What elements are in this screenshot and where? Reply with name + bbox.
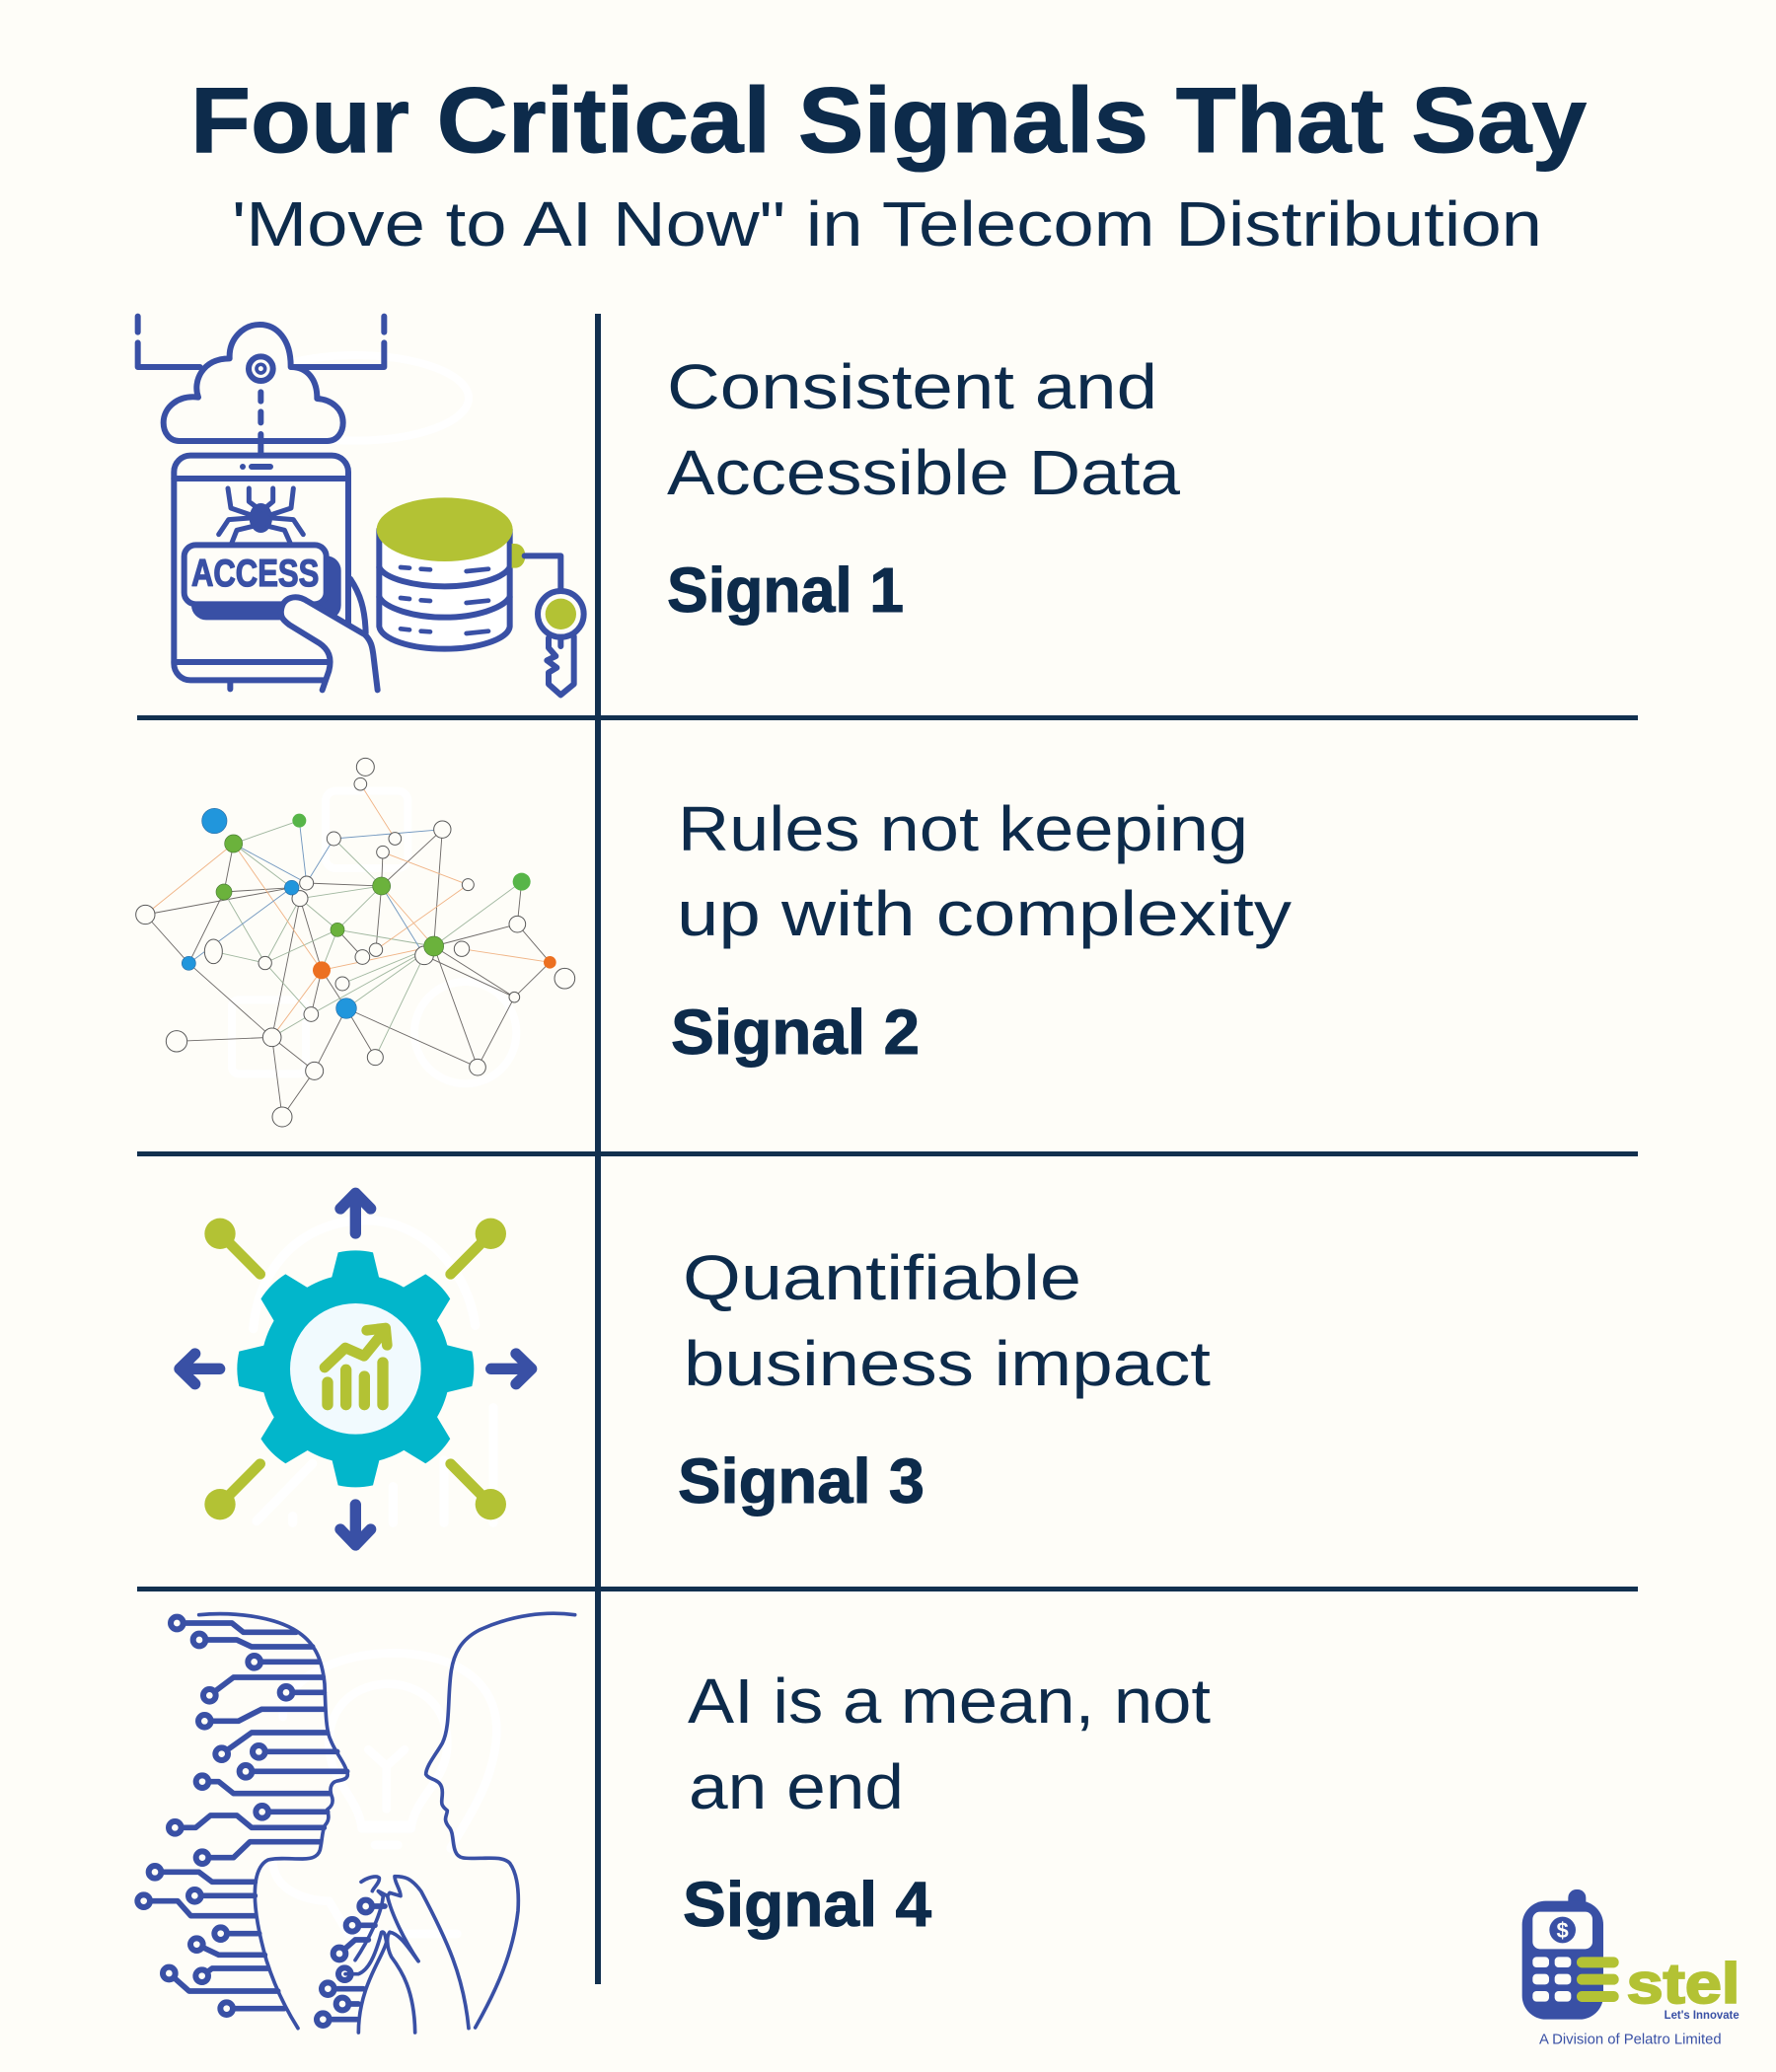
signal 1 statement: Consistent and: [667, 351, 1157, 422]
key: [525, 555, 584, 695]
hands: [345, 1877, 469, 2033]
network nodes: white: [136, 758, 575, 1127]
signal 4 statement: AI is a mean, not: [688, 1665, 1211, 1737]
spider: [219, 488, 303, 543]
signal 1 text block: Accessible Data: [667, 437, 1180, 508]
signal 1 label: Signal 1: [667, 555, 904, 626]
network nodes: orange: [313, 956, 556, 979]
signal 4 text block: [683, 1665, 1211, 1940]
horizontal divider 1: [137, 715, 1638, 720]
vertical divider: [595, 314, 601, 1984]
phone handset: [1522, 1889, 1603, 2020]
target in cloud: [249, 356, 273, 455]
signal 3 statement: Quantifiable: [683, 1242, 1081, 1313]
icon: network graph: [136, 758, 575, 1127]
hand: [281, 579, 378, 690]
blue arrows: [180, 1193, 532, 1545]
signal 2 statement: Rules not keeping: [678, 793, 1248, 864]
signal 1 text block: [667, 351, 1180, 626]
division note: A Division of Pelatro Limited: [1539, 2033, 1722, 2048]
signal 3 text block: [678, 1242, 1211, 1517]
green spokes: [204, 1219, 506, 1519]
horizontal divider 2: [137, 1151, 1638, 1156]
circuit traces: [144, 1623, 385, 2020]
tagline: Let's Innovate: [1665, 2008, 1739, 2022]
signal 2 text block: [671, 793, 1292, 1068]
signal 4 text block: an end: [689, 1751, 904, 1822]
signal 2 label: Signal 2: [671, 997, 920, 1068]
logo: Estel: [1522, 1889, 1739, 2048]
database: [377, 497, 525, 649]
signal 4 label: Signal 4: [683, 1869, 931, 1940]
wordmark: stel: [1627, 1953, 1739, 2016]
access button: [185, 545, 341, 620]
access button: ACCESS: [191, 552, 319, 595]
left head outline: [199, 1614, 347, 2029]
icon: circuit head facing human silhouette: [137, 1613, 575, 2033]
network edges: [145, 784, 550, 1117]
title: Four Critical Signals That Say: [190, 68, 1587, 172]
horizontal divider 3: [137, 1587, 1638, 1591]
circuit terminals: [137, 1617, 372, 2026]
signal 2 text block: up with complexity: [677, 878, 1292, 949]
subtitle: 'Move to AI Now" in Telecom Distribution: [232, 188, 1542, 259]
E bars: [1577, 1957, 1619, 2002]
phone: [174, 456, 348, 689]
network nodes: green: [216, 814, 531, 956]
phone handset: $: [1557, 1918, 1569, 1943]
network nodes: blue: [182, 808, 356, 1018]
icon: gear with growth chart and arrows: [180, 1193, 532, 1545]
gear: [237, 1250, 474, 1487]
cloud: [164, 325, 343, 441]
signal 3 label: Signal 3: [678, 1445, 925, 1517]
right head outline: [426, 1613, 575, 2028]
icon: cloud, phone access and database key: [138, 317, 584, 695]
signal 3 text block: business impact: [684, 1328, 1211, 1399]
growth bars and trend arrow: [325, 1328, 387, 1405]
